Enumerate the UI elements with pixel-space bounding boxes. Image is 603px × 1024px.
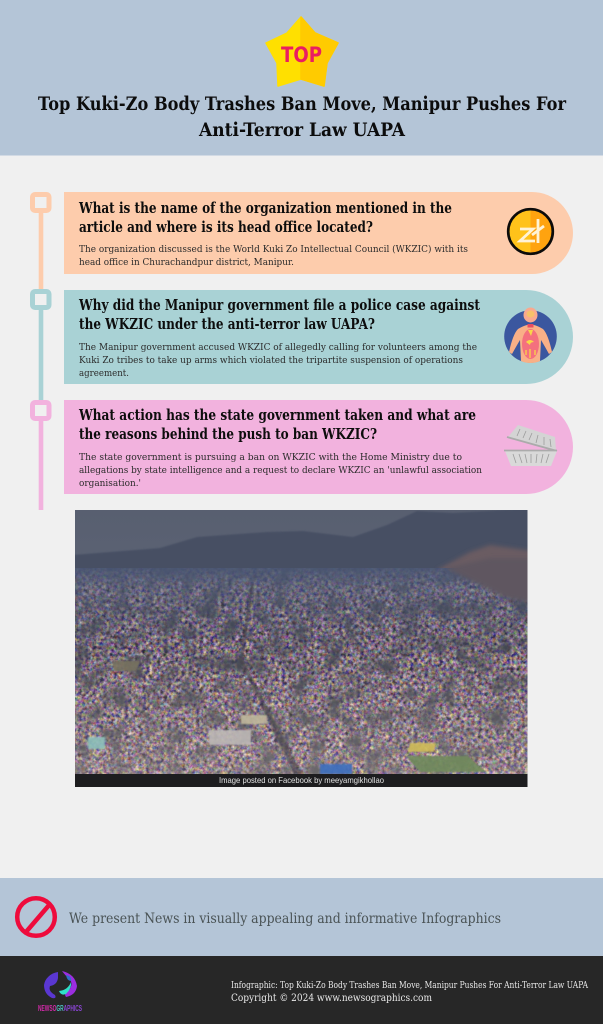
- question 1: article and where is its head office located?: [79, 219, 373, 236]
- tagline band: [0, 878, 603, 956]
- panel: state government action: [64, 400, 573, 494]
- icon: top star: [266, 17, 338, 86]
- answer 1: head office in Churachandpur district, Manipur.: [79, 257, 294, 268]
- question 2: Why did the Manipur government file a police case against: [78, 297, 480, 314]
- question 2: [78, 297, 480, 333]
- answer 1: The organization discussed is the World Kuki Zo Intellectual Council (WKZIC) with its: [79, 244, 468, 255]
- icon: human body: [504, 308, 557, 363]
- icon: zloty coin: [508, 209, 553, 254]
- photo: aerial view of town: [60, 508, 540, 787]
- city texture: [75, 568, 528, 774]
- question 3: What action has the state government taken and what are: [78, 407, 476, 424]
- main road: [239, 583, 302, 774]
- question 3: [78, 407, 476, 443]
- answer 1: [79, 244, 468, 268]
- panel: organization name: [64, 192, 573, 274]
- timeline: [32, 194, 49, 510]
- logo: NewsoGraphics: NEWSOGRAPHICS: [38, 1004, 82, 1013]
- question 1: [78, 200, 452, 236]
- title: [38, 93, 567, 141]
- answer 3: organisation.': [79, 478, 141, 489]
- attribution text: [231, 981, 588, 1004]
- question 3: the reasons behind the push to ban WKZIC?: [79, 426, 377, 443]
- caption bar: Image posted on Facebook by meeyamgikhollao: [219, 775, 384, 785]
- footer: [0, 956, 603, 1024]
- answer 2: agreement.: [79, 368, 129, 379]
- answer 2: [79, 342, 477, 379]
- answer 2: Kuki Zo tribes to take up arms which violated the tripartite suspension of operations: [79, 355, 463, 366]
- buildings: [88, 661, 486, 774]
- header band: [0, 0, 603, 156]
- icon: prohibition sign: [17, 898, 55, 936]
- answer 3: [79, 452, 482, 489]
- answer 2: The Manipur government accused WKZIC of allegedly calling for volunteers among the: [79, 342, 477, 353]
- answer 3: allegations by state intelligence and a request to declare WKZIC an 'unlawful association: [79, 465, 482, 476]
- panel: police case: [64, 290, 573, 384]
- question 2: the WKZIC under the anti-terror law UAPA?: [79, 316, 375, 333]
- question 1: What is the name of the organization mentioned in the: [78, 200, 452, 217]
- tagline text: We present News in visually appealing and informative Infographics: [69, 911, 501, 927]
- icon: top star: TOP: [281, 43, 322, 67]
- attribution text: Copyright © 2024 www.newsographics.com: [231, 993, 432, 1004]
- caption bar: [75, 774, 528, 787]
- answer 3: The state government is pursuing a ban on WKZIC with the Home Ministry due to: [79, 452, 462, 463]
- icon: open container: [504, 425, 557, 466]
- mountains: [75, 510, 528, 568]
- logo: NewsoGraphics: [38, 971, 82, 1013]
- foreground hillside: [449, 560, 528, 602]
- title: Anti-Terror Law UAPA: [198, 119, 405, 141]
